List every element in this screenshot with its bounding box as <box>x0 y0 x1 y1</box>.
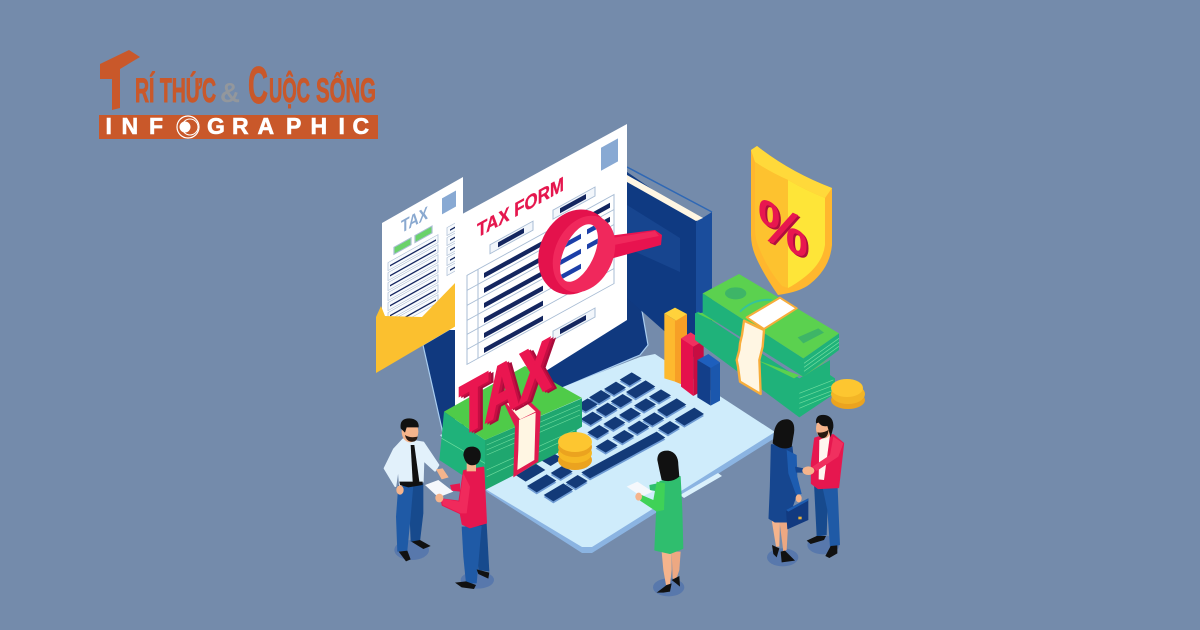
infographic canvas <box>99 50 865 596</box>
woman in green dress <box>627 451 684 596</box>
yellow bar <box>664 308 687 387</box>
laptop screen <box>423 225 648 438</box>
logo wordmark: & <box>220 77 240 108</box>
form table bars <box>484 203 610 353</box>
logo wordmark: SỐNG <box>316 71 376 110</box>
upper stack <box>703 274 839 377</box>
small paper checkboxes <box>394 226 432 254</box>
red-edged band <box>503 398 541 477</box>
right coins <box>831 379 865 409</box>
right money stacks <box>695 274 839 417</box>
magnifier ring <box>525 197 625 307</box>
small tax paper <box>382 177 463 331</box>
shield with percent sign <box>751 146 832 295</box>
main tax form paper <box>455 124 627 428</box>
3D bar chart <box>664 308 720 406</box>
laptop base <box>440 354 775 553</box>
3D TAX lettering <box>459 320 556 457</box>
envelope <box>376 282 456 373</box>
form top fields <box>490 187 595 254</box>
woman in blue dress with briefcase <box>767 419 808 566</box>
red bar <box>681 332 704 396</box>
3D TAX lettering: TAX <box>464 324 556 454</box>
key tops <box>516 372 704 501</box>
lower stack <box>695 312 835 417</box>
man in white shirt <box>385 418 449 561</box>
centre coins <box>558 432 592 470</box>
small paper square stamp <box>442 191 456 214</box>
magnifying glass <box>538 210 662 294</box>
form stamp square <box>601 138 618 171</box>
logo infographic bar: INF <box>106 113 163 139</box>
stack faces <box>439 412 485 490</box>
left money stack <box>439 366 582 490</box>
form bottom field <box>553 308 595 340</box>
logo wordmark: RÍ THỨC <box>135 72 216 110</box>
percent sign: % <box>760 186 810 274</box>
percent sign: % <box>758 184 808 272</box>
magnifier handle <box>608 230 662 259</box>
man in red jacket <box>425 447 494 589</box>
logo wordmark <box>135 57 376 115</box>
briefcase <box>786 498 808 529</box>
small paper rows <box>388 219 463 331</box>
man in red blazer <box>802 415 843 558</box>
people group left <box>385 418 684 596</box>
shield body <box>751 146 832 295</box>
logo infographic bar <box>99 113 378 139</box>
form table <box>467 195 614 364</box>
3D TAX lettering: TAX <box>462 324 554 453</box>
small paper heading TAX: TAX <box>401 202 428 238</box>
key shadows <box>527 374 704 503</box>
people group right <box>767 415 843 566</box>
3D TAX lettering: TAX <box>459 323 551 453</box>
book <box>627 167 712 360</box>
logo wordmark: C <box>248 57 268 115</box>
small paper bars <box>390 222 463 327</box>
logo wordmark: UỘC <box>269 71 310 110</box>
logo icon: roof-shaped T <box>100 50 140 110</box>
magnifier lens content <box>560 226 598 278</box>
form title: TAX FORM <box>477 172 564 243</box>
blue bar <box>697 354 720 406</box>
logo infographic bar: GRAPHIC <box>207 113 369 139</box>
money band <box>737 298 797 394</box>
keyboard <box>516 372 704 503</box>
logo: Tri thuc & Cuoc song Infographic <box>99 50 378 139</box>
